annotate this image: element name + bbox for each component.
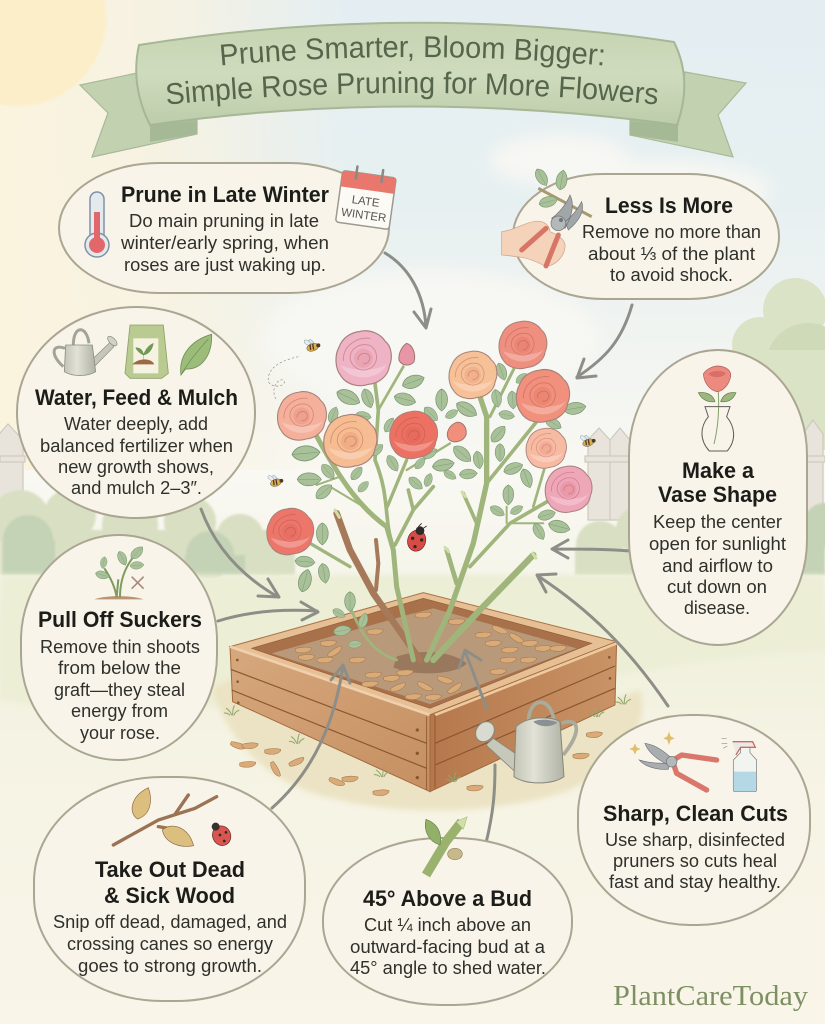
text: less is more: Remove no more than	[582, 222, 761, 242]
right face	[430, 642, 617, 792]
lawn	[0, 575, 825, 709]
text: sharp clean cuts: pruners so cuts heal	[613, 851, 777, 871]
icon: calendar	[336, 165, 397, 229]
text: water, feed and mulch: and mulch 2–3″.	[71, 478, 202, 498]
picket fence	[0, 420, 825, 520]
title ribbon	[79, 22, 747, 158]
text: pull off suckers	[38, 607, 202, 743]
icon: pruners, spray bottle and sparkles	[629, 732, 757, 792]
text: pull off suckers: Pull Off Suckers	[38, 607, 202, 632]
text: prune in late winter: winter/early spring, when	[120, 233, 329, 253]
text: less is more	[582, 193, 761, 285]
text: water, feed and mulch: Water deeply, add	[64, 414, 208, 434]
icon: leaf	[181, 334, 212, 375]
logo: PlantCareToday: PlantCareToday	[613, 981, 808, 1012]
text: make a vase shape: Keep the center	[653, 512, 782, 532]
text: take out dead and sick wood	[53, 857, 287, 976]
icon: sprout with x	[94, 544, 146, 599]
text: water, feed and mulch: balanced fertilizer when	[40, 436, 233, 456]
far trees right	[732, 278, 825, 450]
title ribbon: Simple Rose Pruning for More Flowers	[167, 71, 658, 106]
icon: calendar: LATE	[351, 194, 381, 210]
text: take out dead and sick wood: Snip off dead, damaged, and	[53, 912, 287, 932]
leaves	[291, 362, 587, 649]
panel: make a vase shape	[629, 350, 807, 645]
bees with dashed trail	[267, 339, 596, 488]
arrow: late winter	[385, 253, 431, 328]
text: pull off suckers: graft—they steal	[54, 680, 185, 700]
panel: take out dead and sick wood	[34, 777, 305, 1001]
panel: less is more	[502, 167, 779, 299]
text: sharp clean cuts: fast and stay healthy.	[609, 872, 781, 892]
text: less is more: Less Is More	[605, 193, 733, 218]
arrows to the plant	[201, 253, 668, 843]
text: take out dead and sick wood: & Sick Wood	[104, 883, 235, 908]
raised garden bed	[224, 593, 631, 796]
hedges	[0, 489, 825, 579]
left face	[230, 647, 430, 792]
clouds	[260, 134, 770, 410]
grass tufts	[224, 706, 239, 715]
text: 45 above a bud: outward-facing bud at a	[350, 937, 546, 957]
text: make a vase shape: Vase Shape	[658, 482, 777, 507]
icon: rose in vase	[698, 366, 736, 451]
watering can beside the bed	[472, 702, 576, 783]
text: take out dead and sick wood: Take Out Dead	[95, 857, 245, 882]
icon: calendar: WINTER	[340, 207, 387, 225]
text: 45 above a bud	[350, 886, 546, 978]
text: water, feed and mulch: Water, Feed & Mulch	[35, 385, 238, 410]
icon: thermometer	[85, 192, 109, 257]
arrow: sharp cuts	[537, 574, 668, 706]
sun	[0, 0, 106, 106]
ladybug	[405, 523, 428, 553]
ribbon tails	[80, 72, 197, 157]
text: prune in late winter: Prune in Late Winter	[121, 182, 329, 207]
arrow: 45 degree	[459, 650, 495, 843]
text: prune in late winter: Do main pruning in late	[129, 211, 319, 231]
icon: watering can	[54, 330, 119, 375]
rose bush	[267, 321, 596, 660]
text: make a vase shape: Make a	[682, 458, 755, 483]
text: make a vase shape	[649, 458, 786, 618]
icon: hand with pruners	[502, 167, 592, 266]
panel: sharp clean cuts	[578, 715, 810, 925]
mulch chips in bed	[295, 612, 566, 700]
outer rim top	[230, 593, 617, 715]
ground patch	[213, 679, 642, 810]
text: take out dead and sick wood: crossing canes so energy	[67, 934, 273, 954]
text: sharp clean cuts: Sharp, Clean Cuts	[603, 801, 788, 826]
stems	[310, 363, 550, 660]
text: sharp clean cuts: Use sharp, disinfected	[605, 830, 785, 850]
soil	[272, 608, 577, 704]
text: make a vase shape: and airflow to	[662, 556, 773, 576]
icon: seed packet	[125, 325, 168, 378]
inner walls	[252, 598, 592, 708]
text: 45 above a bud: 45° angle to shed water.	[350, 958, 546, 978]
text: water, feed and mulch: new growth shows,	[58, 457, 214, 477]
text: 45 above a bud: Cut ¼ inch above an	[364, 915, 531, 935]
text: take out dead and sick wood: goes to strong growth.	[78, 956, 262, 976]
text: pull off suckers: from below the	[58, 658, 181, 678]
arrow: vase shape	[552, 540, 630, 558]
scattered wood chips	[230, 732, 602, 796]
icon: angled cutting	[425, 817, 467, 875]
plank seams	[231, 666, 615, 768]
title text: Prune Smarter, Bloom Bigger:	[220, 36, 604, 68]
text: make a vase shape: open for sunlight	[649, 534, 786, 554]
text: make a vase shape: disease.	[684, 598, 750, 618]
text: pull off suckers: Remove thin shoots	[40, 637, 200, 657]
icon: dead branch and ladybug	[113, 788, 234, 849]
roses	[267, 321, 592, 555]
dead brown cane	[337, 513, 420, 660]
text: make a vase shape: cut down on	[667, 577, 767, 597]
ribbon body	[136, 23, 684, 125]
panel: pull off suckers	[21, 535, 217, 760]
arrow: suckers	[218, 602, 318, 621]
text: less is more: to avoid shock.	[610, 265, 733, 285]
text: prune in late winter: roses are just waking up.	[124, 255, 326, 275]
panel: 45 degrees above a bud	[323, 817, 572, 1005]
text: 45 above a bud: 45° Above a Bud	[363, 886, 532, 911]
text: water, feed and mulch	[35, 385, 238, 498]
panel: prune in late winter	[59, 163, 397, 293]
arrow: less is more	[577, 305, 632, 378]
arrow: dead wood	[272, 665, 350, 808]
rose buds	[399, 343, 415, 365]
text: pull off suckers: energy from	[71, 701, 168, 721]
arrow: water feed mulch	[201, 509, 279, 597]
text: sharp clean cuts	[603, 801, 788, 892]
panel: water, feed and mulch	[17, 307, 255, 518]
text: pull off suckers: your rose.	[80, 723, 160, 743]
text: less is more: about ⅓ of the plant	[588, 244, 755, 264]
text: prune in late winter	[120, 182, 329, 275]
